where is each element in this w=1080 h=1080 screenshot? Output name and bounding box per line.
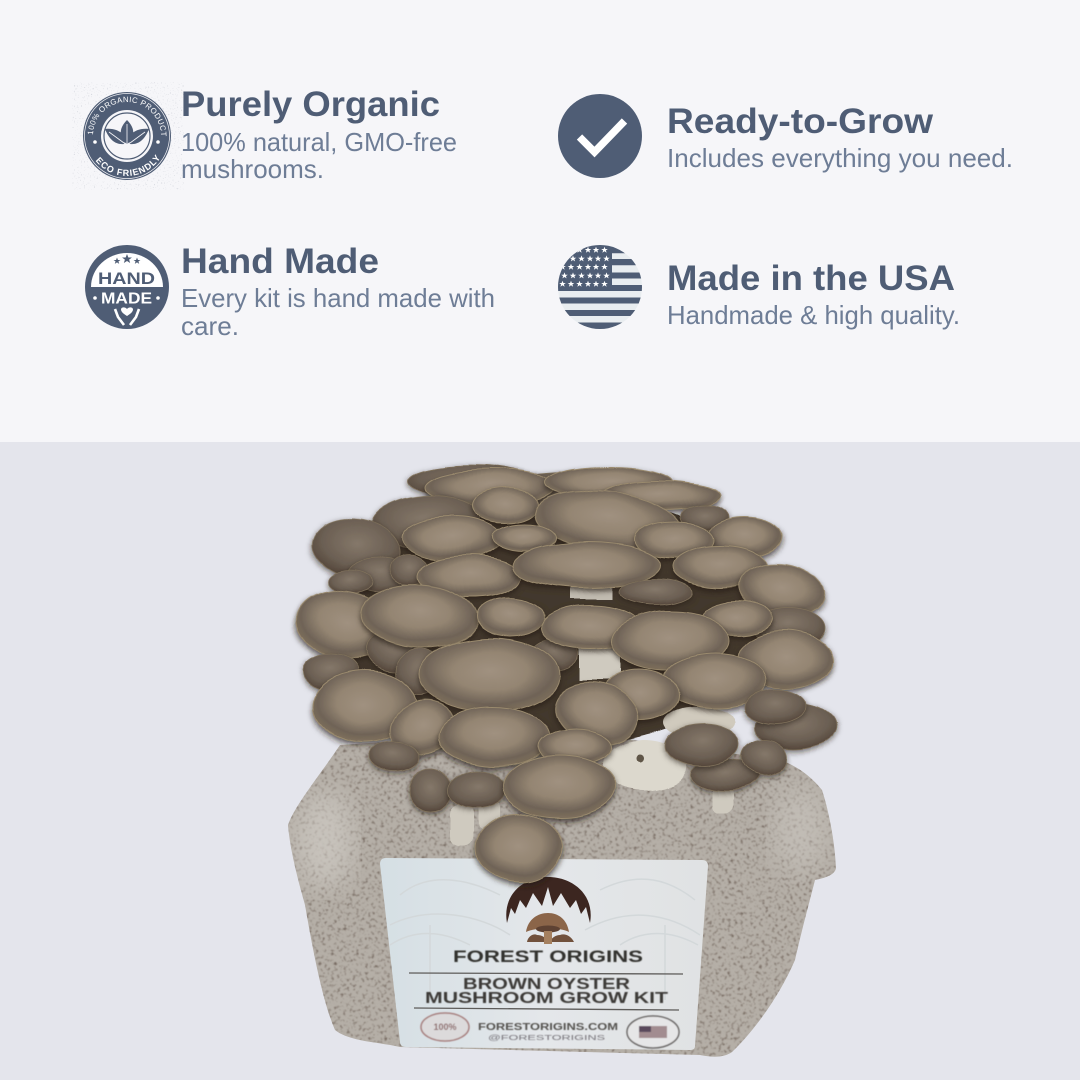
label logo: forest and mushroom: [506, 877, 591, 944]
icon: hand made badge: [85, 245, 169, 329]
text: organic description: mushrooms.: [181, 154, 324, 184]
product label: [380, 858, 708, 1050]
feature: ready-to-grow: [558, 94, 1013, 178]
icon: check mark: [558, 94, 642, 178]
label brand name: FOREST ORIGINS: [453, 947, 643, 966]
icon: organic eco friendly badge: 100% ORGANIC PRODUCT: [88, 96, 166, 136]
label product name: MUSHROOM GROW KIT: [425, 990, 669, 1007]
heading: purely organic: Purely Organic: [181, 85, 440, 124]
icon: hand made badge: HAND: [98, 269, 155, 288]
product photo: mushroom grow kit: [288, 465, 836, 1057]
feature: hand made: [85, 242, 495, 341]
middle caps: [292, 571, 832, 712]
icon: organic eco friendly badge: [72, 82, 184, 190]
label product name: BROWN OYSTER: [463, 976, 630, 993]
upper caps: [308, 465, 828, 622]
text: hand made description: Every kit is hand made with: [181, 283, 495, 313]
lower caps: [313, 670, 835, 882]
top background panel: [0, 0, 1080, 442]
label seal: made in usa: [627, 1016, 679, 1048]
text: organic description: 100% natural, GMO-free: [181, 127, 457, 157]
heading: made in the usa: Made in the USA: [667, 259, 955, 298]
label website: FORESTORIGINS.COM: [478, 1021, 618, 1033]
feature: purely organic: [72, 82, 457, 190]
text: hand made description: care.: [181, 311, 239, 341]
grow bag: [288, 730, 836, 1057]
text: ready-to-grow description: Includes everything you need.: [667, 143, 1013, 173]
shaded interior and white mycelium: [330, 495, 780, 791]
icon: organic eco friendly badge: ECO FRIENDLY: [96, 154, 160, 176]
text: usa description: Handmade & high quality.: [667, 300, 960, 330]
feature: made in the usa: [558, 245, 960, 330]
icon: american flag circle: [558, 245, 642, 329]
heading: ready-to-grow: Ready-to-Grow: [667, 102, 934, 141]
label seal: 100%: 100%: [433, 1022, 457, 1032]
icon: hand made badge: MADE: [101, 290, 152, 308]
heading: hand made: Hand Made: [181, 242, 379, 281]
mushroom cluster: [292, 465, 835, 882]
bottom background panel: [0, 442, 1080, 1080]
label seal: 100%: [421, 1013, 469, 1041]
label social handle: @FORESTORIGINS: [488, 1033, 605, 1042]
